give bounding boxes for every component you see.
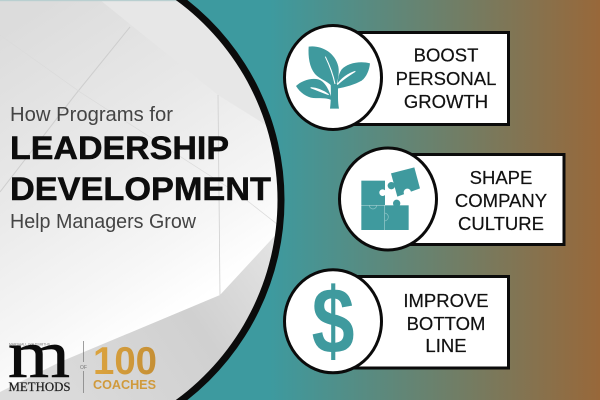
label text <box>455 167 547 234</box>
logo: 100 Coaches: COACHES <box>93 377 156 392</box>
title line: intro: How Programs for <box>10 104 173 126</box>
label text: IMPROVE <box>403 290 489 311</box>
icon: plant <box>296 46 370 109</box>
logo divider <box>80 341 87 393</box>
logo divider: OF <box>80 365 87 371</box>
icon: dollar sign: $ <box>312 269 354 374</box>
label text: BOOST <box>414 44 478 66</box>
label text: BOTTOM <box>407 313 485 334</box>
logo: Marshall Goldsmith's Methods: m <box>8 316 70 392</box>
logo: Marshall Goldsmith's Methods: MARSHALL GOLDSMITHS <box>9 342 50 346</box>
label text <box>403 290 489 356</box>
title line: LEADERSHIP: LEADERSHIP <box>10 130 229 166</box>
label box <box>340 276 508 368</box>
icon circle <box>340 148 436 250</box>
label text: LINE <box>425 335 467 356</box>
icon circle <box>284 26 382 130</box>
label box <box>340 32 508 124</box>
icon circle <box>284 270 382 373</box>
label text: COMPANY <box>455 190 547 211</box>
label text: GROWTH <box>404 91 488 112</box>
panel: architectural photo circle <box>0 0 290 400</box>
label text: CULTURE <box>458 213 544 234</box>
card: improve bottom line <box>284 269 508 374</box>
label text <box>396 44 496 112</box>
logo: Marshall Goldsmith's Methods: METHODS <box>8 379 70 394</box>
title line: DEVELOPMENT: DEVELOPMENT <box>10 171 271 207</box>
card: boost personal growth <box>284 26 508 130</box>
label text: PERSONAL <box>396 68 496 89</box>
label box <box>400 154 564 244</box>
title line: outro: Help Managers Grow <box>10 211 197 233</box>
card: shape company culture <box>340 148 564 250</box>
icon: puzzle pieces <box>361 167 420 230</box>
label text: SHAPE <box>470 167 532 188</box>
logo: 100 Coaches: 100 <box>93 340 157 383</box>
title <box>10 104 271 233</box>
